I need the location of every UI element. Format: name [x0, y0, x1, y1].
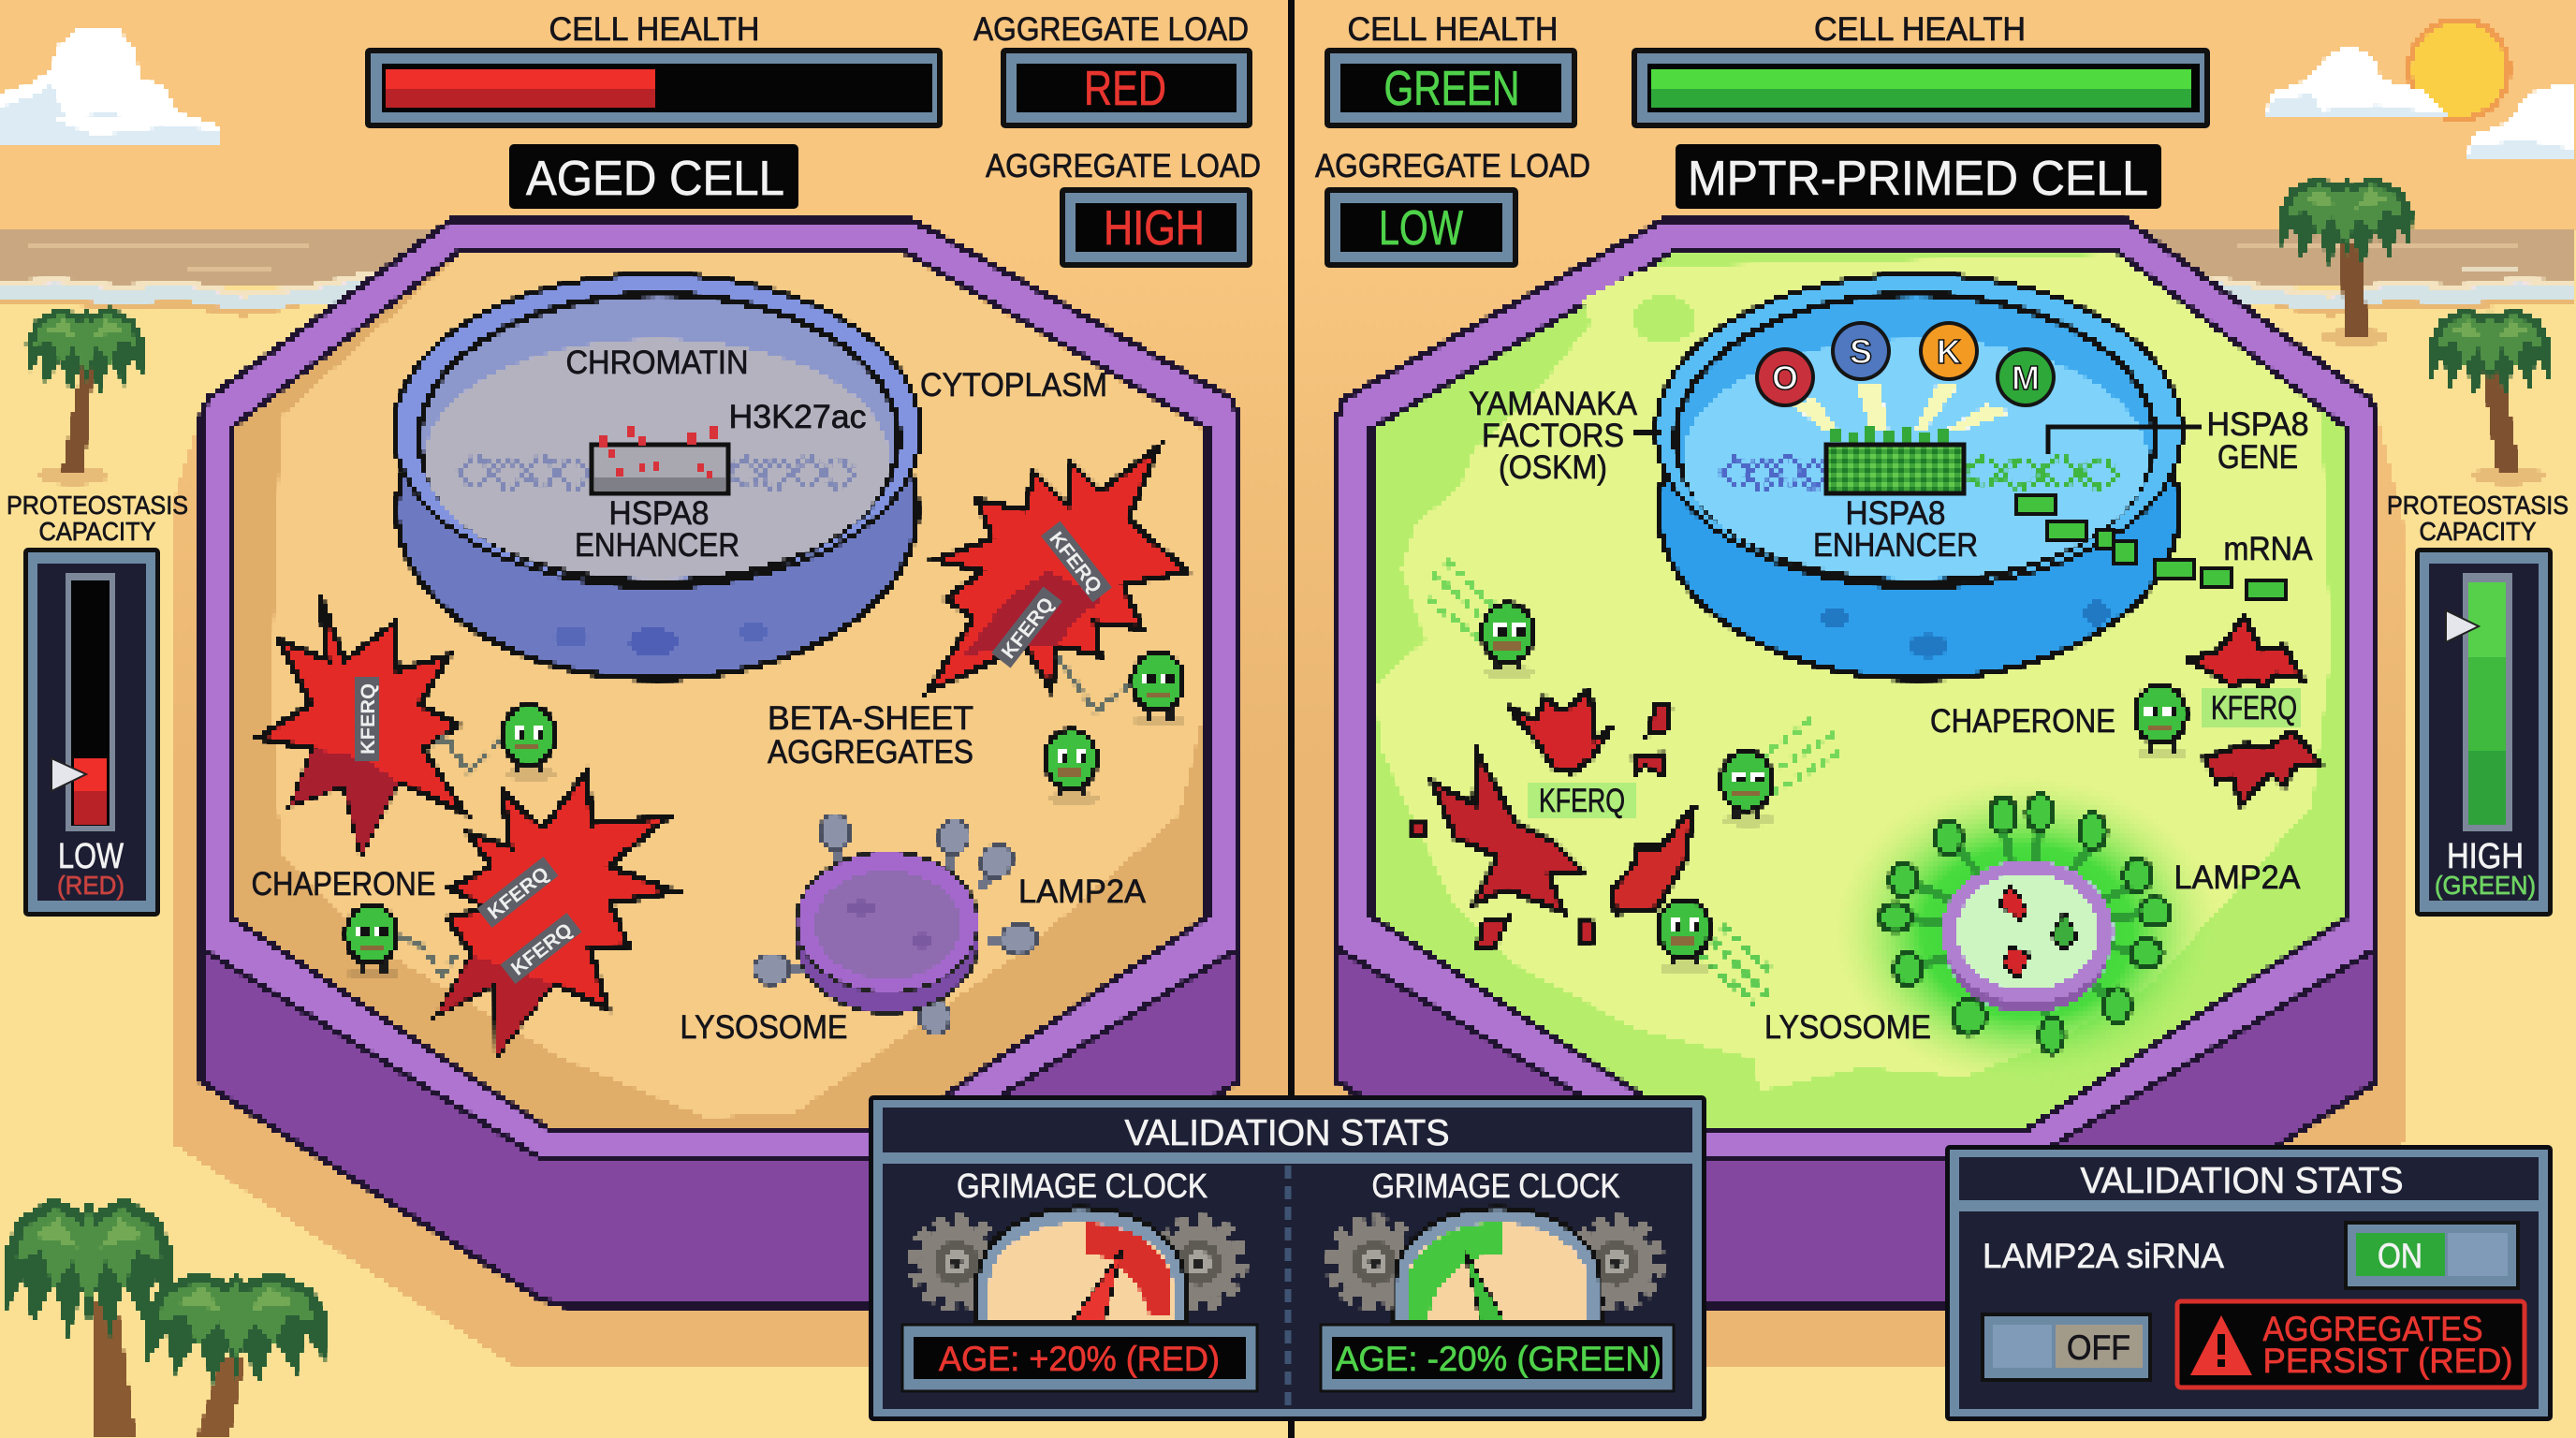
right lysosome	[1836, 777, 2219, 1086]
label: HSPA8 enhancer	[1813, 495, 1978, 564]
left lysosome	[753, 814, 1037, 1035]
ground shadow: left cell	[172, 225, 1288, 1368]
aggregate burst: left	[258, 596, 464, 854]
label: HSPA8 gene: GENE	[2217, 439, 2298, 476]
sun	[2409, 20, 2509, 119]
gauge: aged clock	[914, 1208, 1242, 1322]
aggregate fragments: lower right	[2204, 731, 2320, 805]
readout: GREEN	[1325, 48, 1577, 128]
aggregate burst: lower: KFERQ	[507, 919, 577, 980]
label: GrimAge right: GRIMAGE CLOCK	[1372, 1167, 1619, 1205]
gauge panel: proteostasis high: (GREEN)	[2435, 871, 2536, 900]
aggregate burst: lower: KFERQ	[484, 863, 553, 924]
label: aggregate load top left: AGGREGATE LOAD	[973, 11, 1249, 48]
label: Yamanaka factors: FACTORS	[1482, 418, 1624, 454]
health bar: aged	[365, 48, 943, 128]
readout: age -20%	[1321, 1325, 1674, 1391]
palm tree: upper left	[26, 307, 144, 485]
readout: LOW: LOW	[1379, 201, 1463, 256]
aggregate fragments: upper right	[2188, 616, 2303, 686]
label: aggregate load right: AGGREGATE LOAD	[1315, 148, 1590, 184]
toggle: off	[1983, 1314, 2150, 1380]
label: chaperone left: CHAPERONE	[251, 866, 436, 902]
right cytoplasm	[1371, 251, 2348, 1132]
label: H3K27ac: H3K27ac	[728, 399, 867, 435]
chaperone: left	[435, 703, 557, 781]
active chromatin speckles	[1830, 426, 1949, 444]
lysosome glow	[1836, 777, 2219, 1086]
Yamanaka factor S	[1831, 321, 1891, 381]
background: sky	[0, 0, 2576, 230]
Yamanaka factor K: K	[1937, 332, 1961, 371]
right cell body	[1338, 220, 2377, 1306]
Yamanaka factor S: S	[1850, 332, 1872, 371]
label: Yamanaka factors: YAMANAKA	[1469, 386, 1638, 422]
label: HSPA8 enhancer: HSPA8	[1846, 495, 1945, 532]
toggle: off: OFF	[2067, 1328, 2130, 1367]
aggregate burst: lower	[439, 771, 674, 1054]
left cytoplasm light area	[271, 255, 1204, 1118]
Yamanaka factor O: O	[1772, 359, 1798, 397]
label: cell health right small: CELL HEALTH	[1348, 11, 1558, 48]
chaperone: top with motion trail	[1428, 562, 1536, 679]
readout: age +20%	[902, 1325, 1257, 1391]
label: mRNA: mRNA	[2224, 531, 2313, 567]
label: LAMP2A left: LAMP2A	[1018, 873, 1147, 910]
divider	[1288, 0, 1295, 1438]
palm tree: right	[2429, 307, 2551, 485]
right cell wall extrusion	[1338, 936, 2377, 1306]
aggregate crumbs	[1413, 702, 1671, 947]
gauge panel: proteostasis high: HIGH	[2447, 837, 2524, 876]
right cell rim	[1338, 220, 2377, 1159]
alert: aggregates persist	[2177, 1301, 2525, 1387]
readout: HIGH: HIGH	[1104, 201, 1205, 256]
readout: LOW	[1325, 187, 1518, 268]
panel: validation stats right	[1945, 1145, 2553, 1421]
heading: VALIDATION STATS	[2080, 1161, 2404, 1201]
toggle: on	[2346, 1223, 2518, 1288]
palm tree: upper right	[2278, 176, 2413, 345]
toggle: on: ON	[2378, 1237, 2422, 1275]
left cell rim	[201, 220, 1238, 1159]
aggregate burst: left: KFERQ	[358, 683, 379, 755]
palm tree: lower left	[4, 1197, 174, 1438]
chaperone: right upper	[1058, 650, 1186, 727]
nucleus shapes	[394, 274, 920, 679]
chaperone: lower with motion trail	[1656, 897, 1769, 1004]
mRNA chips	[2016, 495, 2286, 599]
gauge panel: proteostasis high	[2415, 548, 2553, 917]
cloud left	[0, 26, 222, 144]
KFERQ tag centre: KFERQ	[1539, 783, 1625, 819]
readout: age +20%: AGE: +20% (RED)	[939, 1340, 1220, 1378]
label: Yamanaka factors	[1469, 386, 1638, 486]
label: HSPA8 enhancer: HSPA8	[608, 495, 710, 532]
panel: validation stats center	[869, 1095, 1706, 1421]
readout: age -20%: AGE: -20% (GREEN)	[1336, 1340, 1661, 1378]
label: LAMP2A siRNA: LAMP2A siRNA	[1983, 1237, 2224, 1275]
H3K27ac marks	[599, 426, 718, 478]
lysosome receptor stems	[1895, 826, 2155, 1035]
leader line: HSPA8 gene	[2048, 427, 2202, 454]
readout: RED	[1001, 48, 1252, 128]
label: HSPA8 gene	[2207, 406, 2308, 476]
Yamanaka factor K	[1919, 321, 1979, 381]
right nucleus	[1656, 274, 2182, 679]
label: proteostasis capacity left: CAPACITY	[39, 517, 156, 546]
gauge panel: proteostasis low: (RED)	[57, 871, 124, 900]
label: proteostasis capacity left: PROTEOSTASIS	[7, 491, 188, 520]
title: MPTR-primed cell: MPTR-PRIMED CELL	[1688, 152, 2148, 206]
chaperone: right lower	[1043, 727, 1099, 805]
alert: aggregates persist: PERSIST (RED)	[2263, 1342, 2512, 1380]
chaperone: centre with motion trail	[1719, 721, 1839, 827]
aggregate fragments: central	[1508, 690, 1613, 772]
background: sea left	[0, 230, 449, 316]
enhancer box active	[1826, 445, 1964, 493]
label: LAMP2A right: LAMP2A	[2174, 859, 2301, 896]
cloud far right	[2466, 85, 2576, 160]
level arrow	[2446, 610, 2479, 642]
label: chaperone right: CHAPERONE	[1930, 703, 2115, 740]
KFERQ tag right: KFERQ	[2211, 690, 2297, 726]
chaperone: lower	[344, 902, 457, 980]
enhancer box	[592, 445, 728, 493]
label: lysosome right: LYSOSOME	[1764, 1009, 1931, 1046]
readout: HIGH	[1060, 187, 1252, 268]
label: lysosome left: LYSOSOME	[680, 1009, 848, 1046]
heading: VALIDATION STATS	[1125, 1113, 1449, 1153]
dashed divider	[1284, 1166, 1292, 1407]
title: aged cell: AGED CELL	[526, 152, 784, 206]
left cytoplasm	[230, 251, 1208, 1132]
label: chromatin: CHROMATIN	[565, 345, 749, 381]
label: GrimAge left: GRIMAGE CLOCK	[957, 1167, 1208, 1205]
aggregate burst: upper right: KFERQ	[998, 594, 1059, 663]
KFERQ tag right	[2202, 688, 2301, 727]
health bar: primed	[1632, 48, 2210, 128]
left nucleus	[394, 274, 920, 679]
lysosome receptor knobs	[1880, 795, 2171, 1053]
label: proteostasis capacity left	[7, 491, 188, 546]
palm tree: lower middle	[144, 1271, 328, 1438]
left cell wall extrusion	[201, 936, 1238, 1306]
label: cytoplasm: CYTOPLASM	[920, 367, 1107, 404]
nucleus shapes	[1656, 274, 2182, 679]
gauge panel: proteostasis low: LOW	[58, 837, 124, 876]
cloud right	[2265, 44, 2446, 119]
left cell body	[201, 220, 1238, 1306]
Yamanaka factor M	[1996, 347, 2056, 407]
label: beta-sheet aggregates: BETA-SHEET	[768, 700, 973, 737]
ground shadow: right cell	[1288, 225, 2404, 1368]
label: HSPA8 enhancer: ENHANCER	[1813, 527, 1978, 564]
icon: warning triangle	[2190, 1315, 2252, 1375]
readout: RED: RED	[1084, 62, 1166, 116]
aggregate burst: upper right	[929, 448, 1187, 691]
chaperone: right cell binding	[2132, 682, 2188, 760]
background: sea right	[2125, 230, 2576, 316]
leader line: Yamanaka	[1633, 430, 1661, 435]
label: aggregate load left: AGGREGATE LOAD	[986, 148, 1261, 184]
label: cell health right: CELL HEALTH	[1814, 11, 2026, 48]
label: Yamanaka factors: (OSKM)	[1499, 449, 1607, 486]
aggregate shard	[1612, 805, 1694, 913]
aggregate fragments: large	[1432, 753, 1582, 912]
label: HSPA8 gene: HSPA8	[2207, 406, 2308, 443]
readout: GREEN: GREEN	[1383, 62, 1520, 116]
Yamanaka factor O	[1755, 347, 1815, 407]
right cytoplasm light area	[1376, 255, 2331, 1091]
aggregate burst: upper right: KFERQ	[1045, 528, 1105, 597]
label: HSPA8 enhancer	[575, 495, 739, 564]
level arrow	[51, 758, 86, 791]
label: beta-sheet aggregates: AGGREGATES	[768, 734, 973, 770]
alert: aggregates persist: AGGREGATES	[2263, 1310, 2482, 1348]
gauge: primed clock	[1331, 1208, 1660, 1322]
gauge panel: proteostasis low	[23, 548, 160, 917]
label: cell health left: CELL HEALTH	[549, 11, 760, 48]
label: proteostasis capacity right	[2387, 491, 2569, 546]
label: proteostasis capacity right: CAPACITY	[2419, 517, 2537, 546]
label: HSPA8 enhancer: ENHANCER	[575, 527, 739, 564]
label: beta-sheet aggregates	[768, 700, 973, 770]
degraded cargo	[1998, 885, 2078, 978]
Yamanaka factor M: M	[2012, 359, 2040, 397]
